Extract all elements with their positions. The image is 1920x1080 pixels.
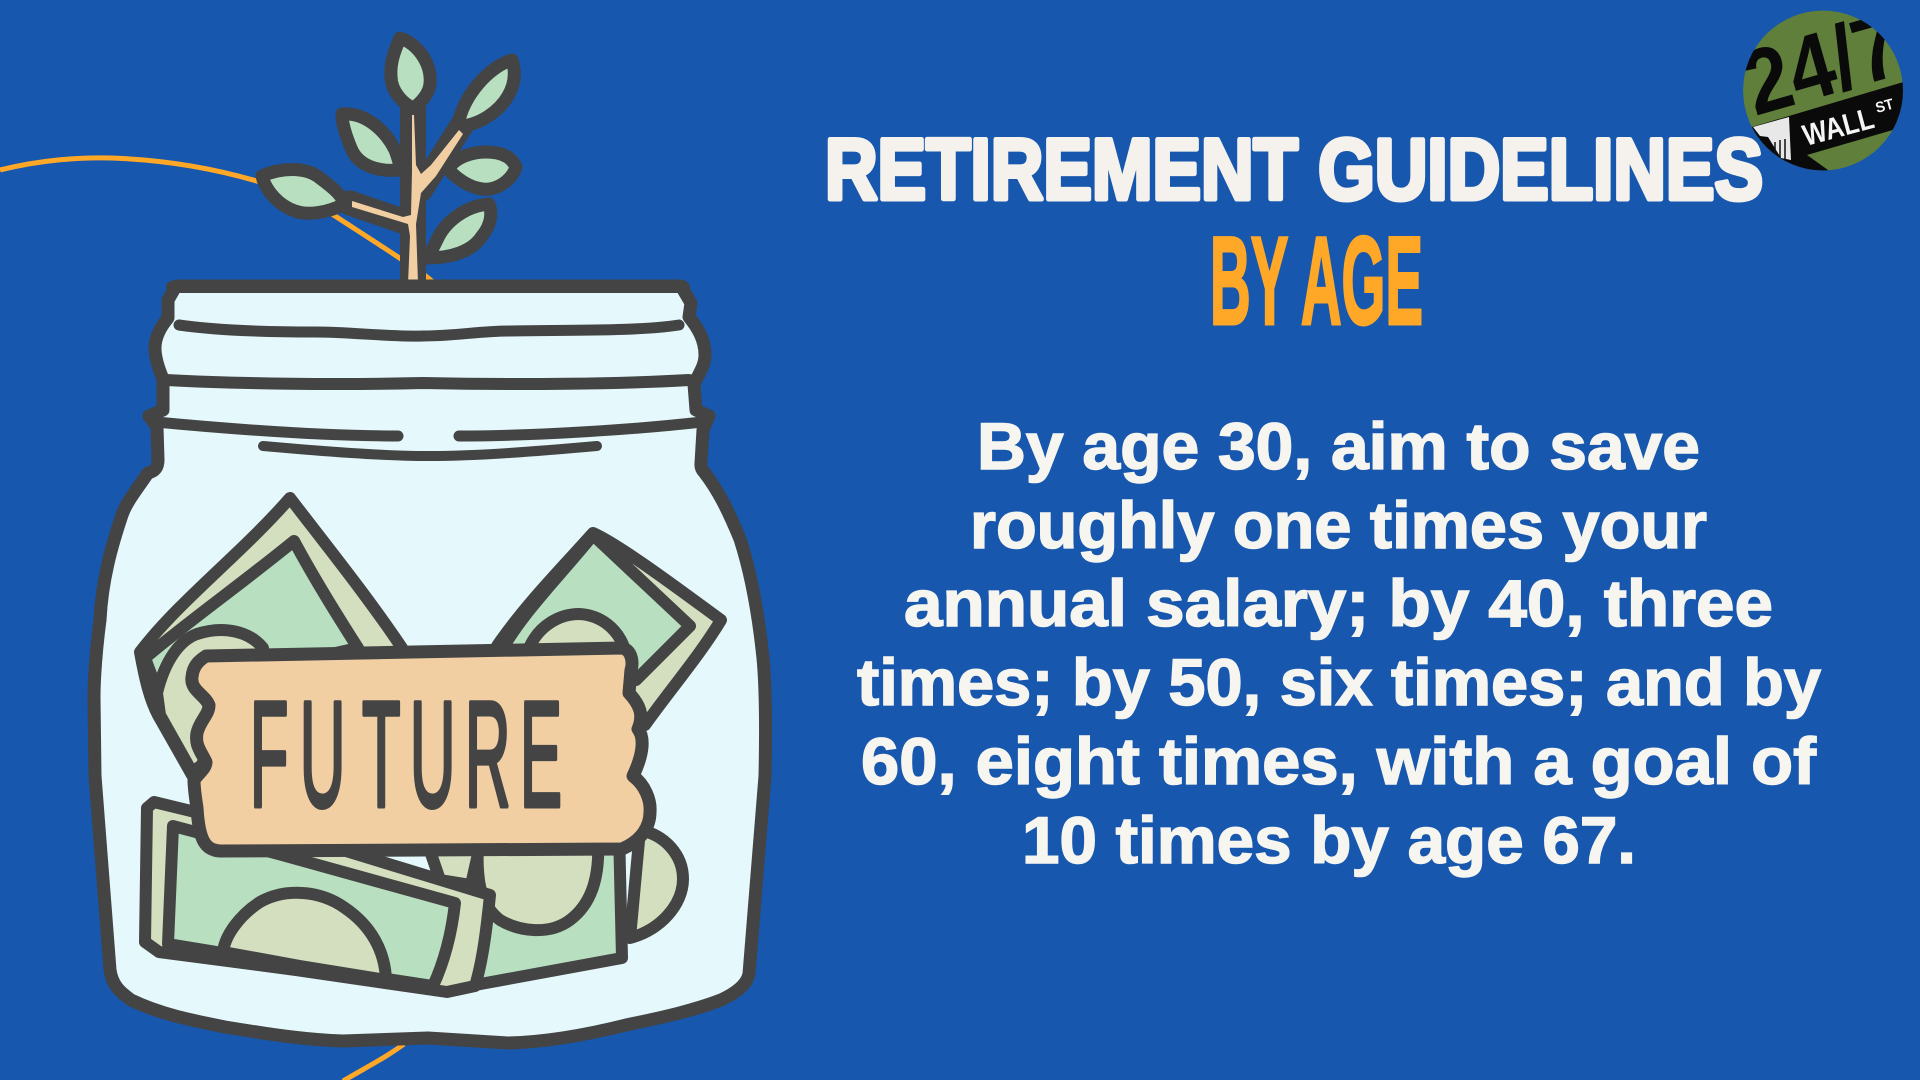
title xyxy=(825,122,1763,351)
logo wall text: WALL xyxy=(1799,101,1877,152)
right coin xyxy=(630,830,683,938)
title: BY AGE xyxy=(1210,212,1423,351)
title line one: RETIREMENT GUIDELINES xyxy=(825,122,1763,218)
label word: FUTURE xyxy=(250,672,562,839)
plant sprout xyxy=(262,38,516,290)
body paragraph: roughly one times your xyxy=(970,488,1707,562)
orange decorative curve xyxy=(0,158,436,1080)
logo band xyxy=(1752,82,1903,170)
stem outline xyxy=(350,105,462,290)
back bottom bill xyxy=(470,830,622,985)
logo st text: ST xyxy=(1874,96,1896,117)
top right bill xyxy=(497,533,721,725)
body paragraph: times; by 50, six times; and by xyxy=(857,645,1821,719)
glass jar xyxy=(94,286,766,1043)
body paragraph: By age 30, aim to save xyxy=(977,409,1700,483)
money bills xyxy=(140,498,721,992)
top left bill xyxy=(140,498,402,775)
front bottom bill xyxy=(145,802,490,992)
body paragraph xyxy=(857,409,1821,877)
logo building xyxy=(1753,117,1791,160)
logo: 24/7 Wall St xyxy=(1743,10,1903,170)
FUTURE label xyxy=(192,648,650,851)
stem fill xyxy=(352,115,463,284)
jar body xyxy=(94,286,766,1043)
body paragraph: annual salary; by 40, three xyxy=(904,566,1773,640)
leaves xyxy=(262,38,516,258)
lid and neck lines xyxy=(156,287,702,456)
body paragraph: 60, eight times, with a goal of xyxy=(861,724,1817,798)
body paragraph: 10 times by age 67. xyxy=(1022,803,1636,877)
